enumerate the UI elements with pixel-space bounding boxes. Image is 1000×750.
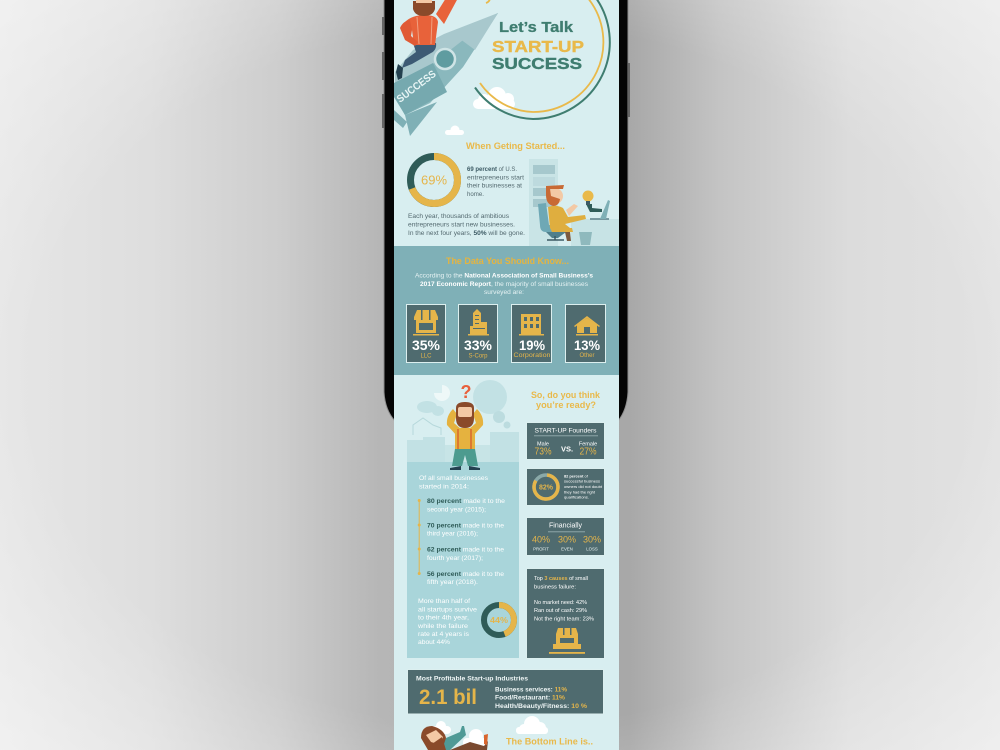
- card: LLC: LLC: [420, 354, 432, 360]
- panel: hero: [394, 0, 610, 136]
- donut: 69 percent: 69%: [421, 172, 447, 188]
- card: financially: 30%: [583, 534, 602, 546]
- card: LLC: 35%: [412, 337, 441, 353]
- title: [492, 20, 584, 73]
- character: thinking man: [447, 382, 483, 470]
- panel: data band: [394, 246, 619, 375]
- card: founders: [526, 422, 604, 460]
- stat: 2.1 bil: 2.1 bil: [419, 686, 477, 709]
- title: Let’s Talk: [499, 20, 574, 36]
- card: 82 percent: [526, 468, 604, 506]
- text: 69 percent: entrepreneurs start: [467, 174, 524, 182]
- text: more than half: to their 4th year,: [418, 615, 469, 622]
- card: financially: LOSS: [586, 546, 598, 552]
- panel: most profitable: Most Profitable Start-up Industries: [416, 676, 528, 682]
- panel: bottom line: [421, 716, 593, 750]
- circular arcs: [475, 0, 610, 119]
- card: S-Corp: [458, 304, 498, 362]
- card: Corporation: [512, 304, 552, 362]
- card: 82 percent: they had the right: [564, 489, 596, 494]
- text: of all small businesses: [419, 475, 488, 490]
- card: financially: EVEN: [561, 546, 573, 552]
- heading: [531, 390, 601, 410]
- card: 82 percent: qualifications.: [564, 495, 589, 500]
- heading: So, do you think: [531, 390, 601, 400]
- card: Other: [566, 304, 606, 362]
- icon: clouds: [431, 716, 548, 750]
- character: falling man: [421, 726, 488, 750]
- text: 69 percent: home.: [467, 191, 484, 198]
- timeline: 70 percent made it to the: [427, 522, 505, 529]
- panel: when getting started: [408, 141, 619, 246]
- character: thinking man: ?: [460, 382, 472, 402]
- card: causes of failure: Ran out of cash: 29%: [534, 608, 587, 614]
- donut: 44 percent: [484, 605, 514, 635]
- card: 82 percent: 82 percent of: [564, 473, 589, 478]
- card: causes of failure: Top 3 causes of small: [534, 576, 588, 582]
- icon: porthole: [435, 49, 455, 69]
- card: Corporation: 19%: [519, 337, 546, 353]
- timeline: 62 percent made it to the: [427, 547, 505, 554]
- illustration: man at desk: [529, 159, 619, 246]
- icon: store: [413, 310, 439, 336]
- heading: you’re ready?: [536, 400, 596, 410]
- title: START-UP: [492, 39, 584, 56]
- donut: 44 percent: 44%: [490, 615, 508, 625]
- card: causes of failure: Not the right team: 23%: [534, 616, 594, 622]
- card: financially: PROFIT: [533, 546, 549, 552]
- text: more than half: rate at 4 years is: [418, 631, 470, 638]
- list: industries: Food/Restaurant: 11%: [495, 694, 565, 702]
- character: man on rocket: [396, 0, 458, 80]
- heading: When Geting Started...: [466, 141, 565, 151]
- title: SUCCESS: [492, 56, 582, 73]
- card: S-Corp: S-Corp: [468, 354, 488, 360]
- text: of all small businesses: Of all small businesses: [419, 475, 488, 482]
- card: financially: [526, 518, 604, 556]
- text: each year: Each year, thousands of ambitious: [408, 213, 510, 220]
- timeline: fifth year (2018).: [427, 579, 478, 586]
- card: 82 percent: successful business: [564, 479, 600, 484]
- timeline: second year (2015);: [427, 506, 486, 513]
- list: industries: [495, 686, 587, 710]
- heading: The Data You Should Know...: [446, 256, 569, 266]
- panel: most profitable: [408, 670, 604, 714]
- text: more than half: all startups survive: [418, 606, 477, 613]
- card: founders: Male: [537, 442, 549, 448]
- list: industries: Health/Beauty/Fitness: 10 %: [495, 703, 587, 710]
- icon: market stall: [549, 628, 585, 654]
- card: causes of failure: No market need: 42%: [534, 600, 587, 606]
- icon: clouds: [445, 87, 515, 135]
- card: LLC: [406, 304, 446, 362]
- icon: skyscraper: [468, 309, 489, 336]
- card: financially: 30%: [558, 534, 577, 546]
- text: intro: surveyed are:: [484, 289, 524, 296]
- text: intro: 2017 Economic Report, the majority of small businesses: [420, 281, 589, 288]
- text: of all small businesses: started in 2014:: [419, 484, 469, 490]
- icon: house: [574, 316, 600, 336]
- text: more than half: [417, 598, 477, 646]
- card: S-Corp: 33%: [464, 337, 493, 353]
- text: 69 percent: their businesses at: [467, 183, 522, 190]
- timeline: 80 percent made it to the: [427, 498, 506, 505]
- card: financially: 40%: [532, 534, 551, 546]
- text: each year: [408, 213, 525, 237]
- donut: 82 percent: 82%: [539, 484, 554, 492]
- text: each year: In the next four years, 50% will be gone.: [408, 230, 525, 237]
- card: founders: VS.: [561, 444, 573, 454]
- card: founders: START-UP Founders: [534, 428, 597, 434]
- background doodles: [407, 380, 519, 462]
- heading: The Bottom Line is..: [506, 736, 593, 746]
- text: more than half: More than half of: [418, 598, 470, 605]
- timeline: fourth year (2017);: [427, 555, 483, 562]
- icon: office building: [519, 314, 544, 336]
- card: causes of failure: [526, 568, 604, 658]
- card: causes of failure: business failure:: [534, 584, 576, 590]
- rocket illustration: [394, 13, 498, 136]
- donut: 69 percent: [410, 156, 458, 204]
- card: founders: 27%: [580, 446, 596, 458]
- card: financially: Financially: [549, 522, 582, 530]
- list: industries: Business services: 11%: [495, 686, 567, 694]
- card: 82 percent: owners did not doubt: [564, 484, 603, 489]
- text: 69 percent: [467, 166, 524, 198]
- timeline: 56 percent made it to the: [427, 571, 505, 578]
- infographic sheet: [394, 0, 619, 750]
- panel: are you ready left column: [407, 380, 519, 658]
- card: founders: Female: [579, 442, 597, 448]
- icon: light bulb: [582, 190, 594, 205]
- panel: are you ready right column: [526, 390, 604, 658]
- text: more than half: while the failure: [417, 623, 468, 630]
- card: Corporation: Corporation: [514, 353, 550, 359]
- text: intro: [415, 272, 593, 296]
- label: success: SUCCESS: [395, 68, 439, 105]
- text: 69 percent: 69 percent of U.S.: [467, 166, 517, 173]
- card: Other: Other: [579, 353, 595, 359]
- text: more than half: about 44%: [418, 639, 450, 646]
- phone frame: [382, 0, 630, 421]
- timeline: third year (2016);: [427, 530, 478, 538]
- text: intro: According to the National Association of Small Business’s: [415, 272, 593, 280]
- card: Other: 13%: [574, 337, 601, 353]
- card: founders: 73%: [534, 446, 552, 458]
- text: each year: entrepreneurs start new businesses.: [408, 222, 515, 228]
- timeline: [418, 498, 506, 586]
